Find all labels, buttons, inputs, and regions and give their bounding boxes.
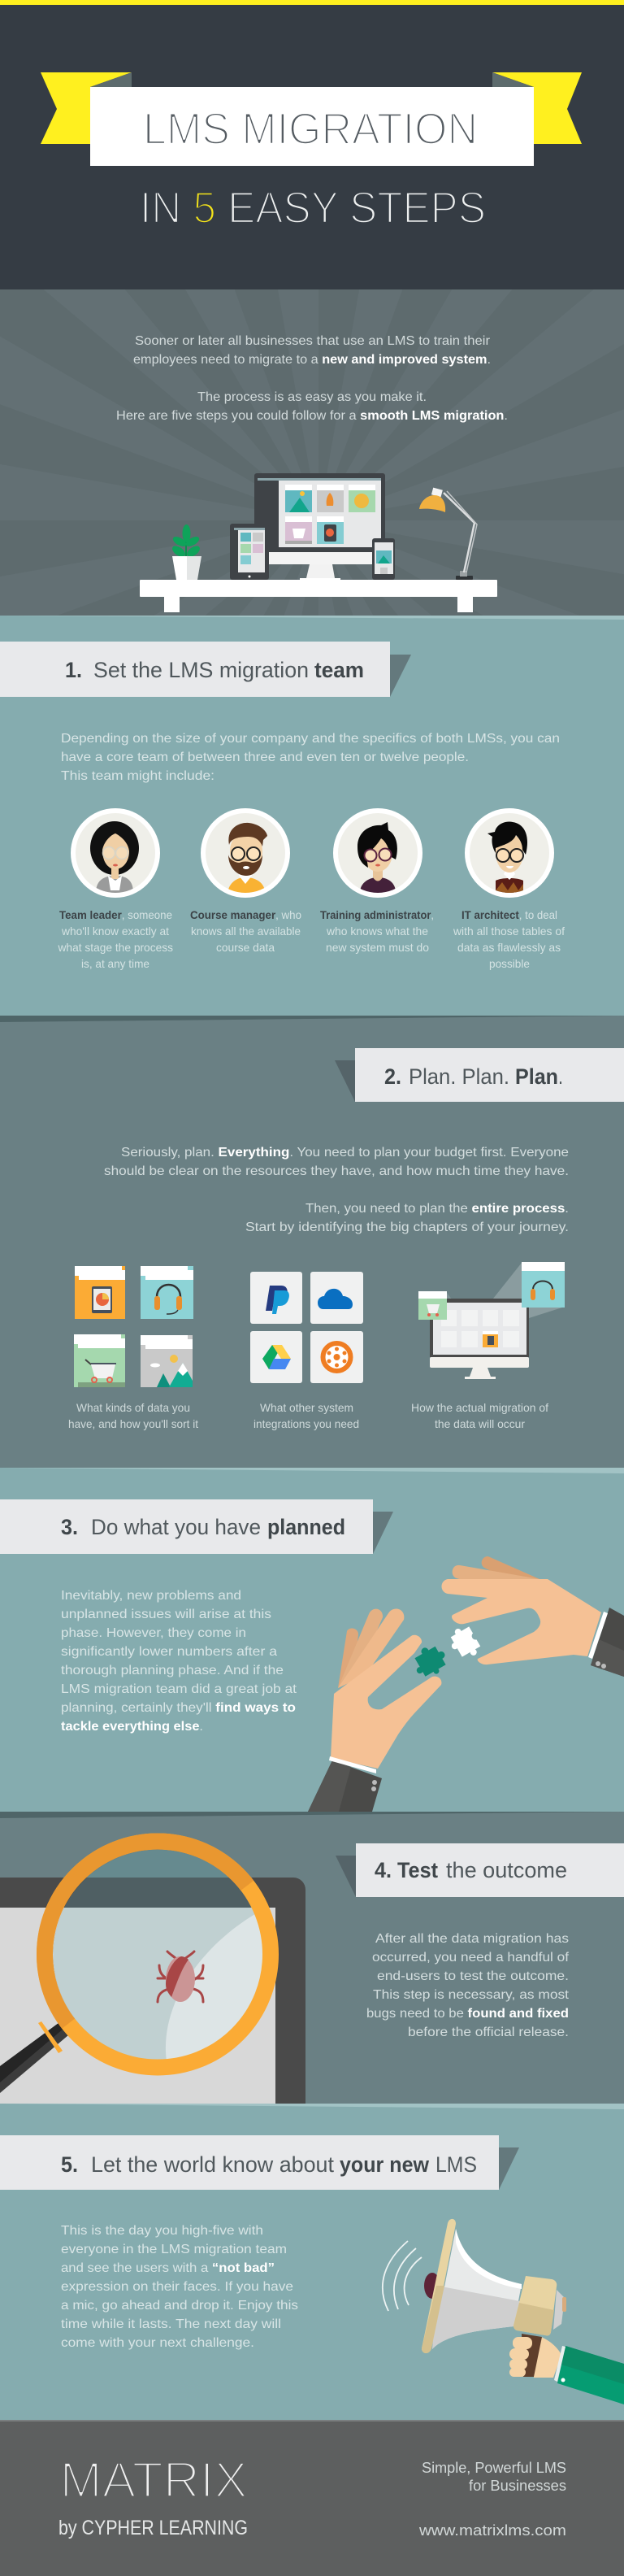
caption: training administrator: new system must do — [326, 941, 429, 954]
step 1 heading — [0, 642, 411, 697]
title ribbon — [41, 72, 582, 166]
caption: training administrator: who knows what the — [326, 925, 428, 938]
step 4 text: end-users to test the outcome. — [377, 1969, 569, 1983]
step 3 text: tackle everything else . — [61, 1720, 203, 1734]
step 5 heading: Let the world know about — [91, 2152, 334, 2177]
caption: data: What kinds of data you — [76, 1401, 190, 1414]
caption: training administrator: Training administrator, — [320, 908, 434, 921]
step 1 heading: Set the LMS migration — [93, 658, 309, 682]
intro text — [116, 334, 508, 423]
logo: MATRIX: MATRIX — [60, 2452, 248, 2509]
avatar: course manager — [201, 808, 290, 898]
step 4 text: occurred, you need a handful of — [372, 1951, 570, 1965]
caption: IT architect — [453, 908, 565, 970]
megaphone illustration — [383, 2219, 624, 2404]
laptop and magnifier illustration — [0, 1841, 306, 2104]
sleeve — [554, 2346, 624, 2404]
step 2 text: Then, you need to plan the entire process . — [306, 1202, 569, 1216]
icon: Google Drive — [250, 1331, 302, 1383]
step 5 text: time while it lasts. The next day will — [61, 2317, 281, 2331]
integration logo tiles — [250, 1272, 363, 1383]
step 5 heading: 5. — [61, 2152, 78, 2177]
caption: integrations: integrations you need — [254, 1417, 359, 1430]
caption: migration: the data will occur — [435, 1417, 525, 1430]
caption: team leader: who'll know exactly at — [61, 925, 169, 938]
step 5 text: and see the users with a “not bad” — [61, 2261, 275, 2275]
icon: white puzzle piece — [445, 1621, 487, 1663]
caption: data — [68, 1401, 198, 1430]
step 4 text: This step is necessary, as most — [373, 1988, 570, 2002]
step 4 heading: 4. — [375, 1858, 392, 1882]
header panel — [0, 0, 624, 289]
intro text: Here are five steps you could follow for a smooth LMS migration. — [116, 409, 508, 423]
icon: desktop monitor — [254, 473, 385, 580]
intro text: Sooner or later all businesses that use an LMS to train their — [135, 334, 491, 348]
icon: right hand — [442, 1556, 624, 1677]
step 5 heading: your new — [340, 2152, 430, 2177]
step 2 heading: 2. — [384, 1064, 401, 1089]
caption: course manager: course data — [216, 941, 275, 954]
tagline — [418, 2460, 566, 2539]
caption: data: have, and how you'll sort it — [68, 1417, 198, 1430]
intro text: employees need to migrate to a new and improved system. — [133, 353, 491, 367]
icon: orange file — [75, 1266, 125, 1319]
caption: IT architect: IT architect, to deal — [462, 908, 557, 921]
sound waves — [383, 2241, 422, 2311]
panel: footer — [0, 2420, 624, 2576]
step 3 text: Inevitably, new problems and — [61, 1589, 241, 1603]
tagline: www.matrixlms.com — [418, 2522, 566, 2539]
migration monitor illustration — [418, 1262, 565, 1379]
step 4 text: before the official release. — [408, 2026, 569, 2039]
step 1 text: This team might include: — [61, 769, 214, 783]
step 3 heading: 3. — [61, 1515, 78, 1539]
step 2 text — [104, 1146, 569, 1234]
icon: phone — [372, 538, 395, 580]
icon: left hand — [308, 1608, 441, 1812]
step 5 text: a mic, go ahead and drop it. Enjoy this — [61, 2299, 298, 2313]
step 3 heading: planned — [267, 1515, 345, 1539]
panel: step 5 — [0, 2104, 624, 2420]
step 4 text: bugs need to be found and fixed — [366, 2007, 569, 2021]
caption: integrations: What other system — [260, 1401, 353, 1414]
tagline: for Businesses — [469, 2478, 566, 2494]
step 1 text: have a core team of between three and even ten or twelve people. — [61, 751, 469, 764]
step 3 heading — [0, 1499, 393, 1554]
step 1 text: Depending on the size of your company and the specifics of both LMSs, you can — [61, 732, 560, 746]
step 2 heading: Plan. Plan. — [409, 1064, 509, 1089]
caption: course manager: knows all the available — [191, 925, 301, 938]
step 2 heading: Plan — [515, 1064, 558, 1089]
step 5 text: expression on their faces. If you have — [61, 2280, 293, 2294]
step 1 text — [61, 732, 560, 783]
subtitle: IN 5 EASY STEPS — [140, 182, 486, 233]
caption: team leader: Team leader, someone — [59, 908, 172, 921]
step 3 text: thorough planning phase. And if the — [61, 1664, 284, 1677]
step 3 text: unplanned issues will arise at this — [61, 1608, 271, 1621]
desk — [140, 580, 497, 612]
step 5 text: everyone in the LMS migration team — [61, 2243, 287, 2256]
step 2 text: Seriously, plan. Everything . You need to plan your budget first. Everyone — [121, 1146, 569, 1160]
step 5 text: This is the day you high-five with — [61, 2224, 263, 2238]
horn — [432, 2229, 566, 2349]
icon: tablet — [230, 524, 269, 580]
icon: flower logo — [310, 1331, 363, 1383]
step 4 text — [366, 1932, 570, 2039]
panel: step 1 — [0, 616, 624, 1016]
panel: intro — [117, 335, 507, 612]
step 4 heading: the outcome — [446, 1858, 567, 1882]
step 3 text: significantly lower numbers after a — [61, 1645, 277, 1659]
step 4 heading: Test — [397, 1858, 438, 1882]
step 2 text: should be clear on the resources they have, and how much time they have. — [104, 1164, 569, 1178]
step 2 heading: . — [558, 1064, 563, 1089]
tagline: Simple, Powerful LMS — [422, 2460, 566, 2476]
caption: training administrator — [320, 908, 434, 954]
avatar: IT architect — [465, 808, 554, 898]
icon: OneDrive — [310, 1272, 363, 1324]
step 3 text — [61, 1589, 297, 1734]
caption: migration — [411, 1401, 548, 1430]
caption: integrations — [254, 1401, 359, 1430]
icon: teal file — [141, 1266, 193, 1319]
icon: green puzzle piece — [409, 1640, 452, 1682]
step 2 heading — [335, 1048, 624, 1102]
icon: green cart file — [74, 1334, 125, 1387]
step 5 heading — [0, 2135, 519, 2190]
icon: lamp — [419, 488, 477, 580]
step 5 text: come with your next challenge. — [61, 2336, 254, 2350]
caption: team leader: what stage the process — [58, 941, 173, 954]
logo: MATRIX — [58, 2452, 248, 2539]
magnifying glass — [0, 1841, 306, 2093]
step 5 text — [61, 2224, 298, 2350]
caption: migration: How the actual migration of — [411, 1401, 548, 1414]
data file icons — [74, 1266, 193, 1387]
hands with puzzle pieces illustration — [308, 1556, 624, 1812]
caption: team leader: is, at any time — [81, 957, 150, 970]
panel: step 3 — [0, 1468, 624, 1812]
intro text: The process is as easy as you make it. — [197, 390, 427, 404]
avatar: team leader — [71, 808, 160, 898]
step 3 text: planning, certainly they'll find ways to — [61, 1701, 296, 1715]
icon: bug — [158, 1952, 203, 2002]
panel: step 2 — [0, 1016, 624, 1468]
caption: course manager: Course manager, who — [190, 908, 301, 921]
avatar: training administrator — [333, 808, 422, 898]
step 2 text: Start by identifying the big chapters of your journey. — [245, 1221, 569, 1234]
step 1 heading: team — [314, 658, 364, 682]
caption: team leader — [58, 908, 173, 970]
step 3 text: phase. However, they come in — [61, 1626, 246, 1640]
desk illustration — [140, 473, 497, 612]
step 5 heading: LMS — [436, 2152, 477, 2177]
step 3 text: LMS migration team did a great job at — [61, 1682, 297, 1696]
caption: IT architect: data as flawlessly as — [457, 941, 561, 954]
rim and band — [422, 2219, 557, 2353]
caption: IT architect: possible — [489, 957, 530, 970]
panel: step 4 — [0, 1812, 624, 2104]
logo: MATRIX: by CYPHER LEARNING — [58, 2517, 248, 2539]
step 1 heading: 1. — [65, 658, 82, 682]
caption: IT architect: with all those tables of — [453, 925, 565, 938]
speaker — [424, 2273, 440, 2299]
step 4 text: After all the data migration has — [375, 1932, 569, 1946]
hand and handle — [509, 2334, 561, 2378]
caption: course manager — [190, 908, 301, 954]
icon: PayPal — [250, 1272, 302, 1324]
step 3 heading: Do what you have — [91, 1515, 261, 1539]
icon: landscape file — [141, 1335, 193, 1387]
icon: plant — [171, 524, 202, 580]
laptop — [0, 1878, 306, 2104]
title ribbon: LMS MIGRATION — [143, 103, 478, 154]
step 4 heading — [336, 1843, 624, 1897]
